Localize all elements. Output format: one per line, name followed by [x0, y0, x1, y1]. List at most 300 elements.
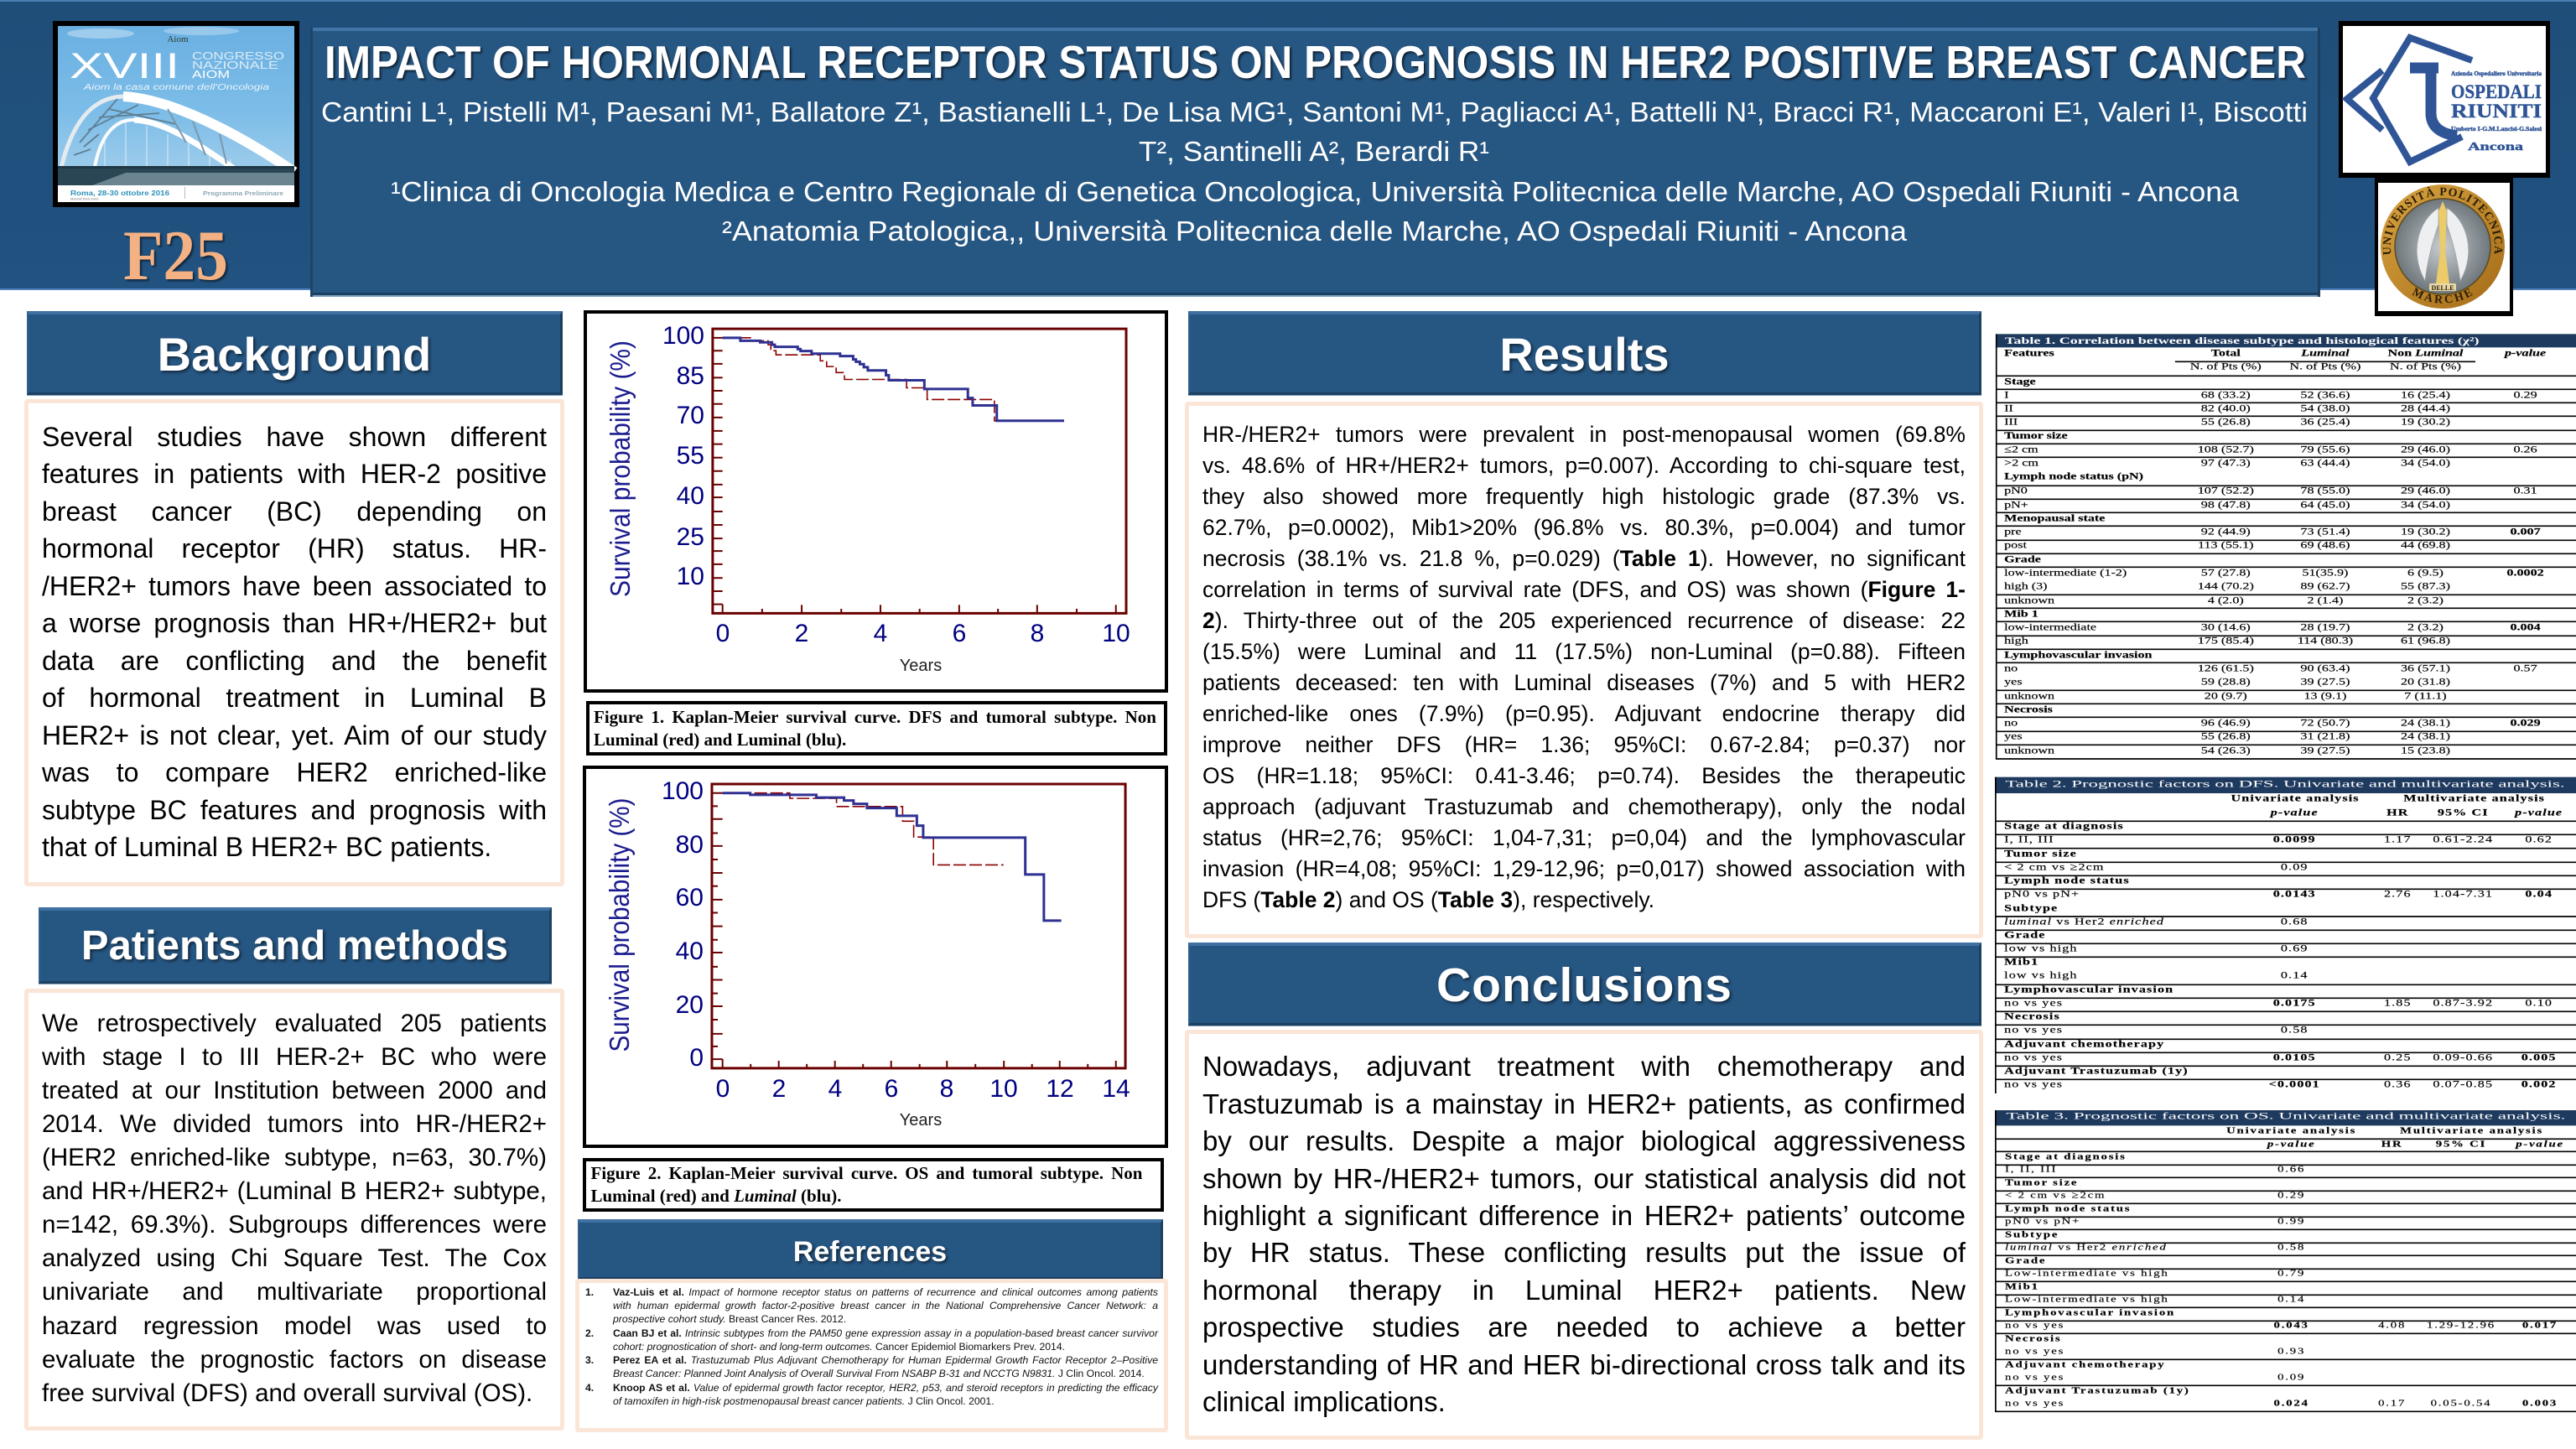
table 1 rows: 16 (25.4): [2401, 389, 2450, 401]
x axis numbers: 8: [1031, 620, 1044, 647]
table 1 rows: 78 (55.0): [2300, 485, 2350, 496]
table 2 rows: 0.10: [2525, 997, 2553, 1009]
table 1 rows: 144 (70.2): [2198, 580, 2254, 592]
table 3 rows: 0.05-0.54: [2431, 1398, 2491, 1408]
chart axes: [713, 329, 1126, 613]
y axis numbers: 10: [677, 563, 704, 590]
congress poster image: [53, 21, 299, 207]
y axis numbers: [662, 777, 704, 1072]
table 3 rows: p-value: [2267, 1139, 2315, 1149]
title panel: [310, 28, 2320, 297]
table 2 rows: 2.76: [2384, 888, 2412, 900]
background paragraph: subtype BC features and prognosis with: [42, 795, 547, 825]
table 1 rows: N. of Pts (%): [2390, 361, 2461, 372]
table 3 rows: 0.99: [2277, 1215, 2305, 1226]
table 3 rows: pN0 vs pN+: [2005, 1215, 2080, 1226]
figure 1 caption: Figure 1. Kaplan-Meier survival curve. DFS and tumoral subtype. Non: [594, 707, 1156, 727]
table 1 rows: 2 (3.2): [2407, 595, 2444, 606]
reference 3: Perez EA et al. Trastuzumab Plus Adjuvant Chemotherapy for Human Epidermal Growth Factor Receptor 2–Positive: [613, 1354, 1158, 1366]
table 1 rows: unknown: [2004, 745, 2054, 756]
table 1 rows: Luminal: [2300, 347, 2350, 359]
table 2: prognostic factors on DFS: [1995, 776, 2576, 1093]
background paragraph: a worse prognosis than HR+/HER2+ but: [42, 608, 547, 638]
table 3 rows: < 2 cm vs ≥2cm: [2005, 1190, 2106, 1200]
panel: background text: [24, 399, 564, 886]
table 3 rows: luminal vs Her2 enriched: [2005, 1241, 2168, 1252]
table 3 rows: 0.14: [2277, 1293, 2305, 1304]
table 1 rows: 2 (3.2): [2407, 621, 2444, 633]
table 1 rows: no: [2004, 662, 2018, 674]
bridge: [61, 96, 294, 172]
logo: Università Politecnica delle Marche seal: DELLE: [2431, 284, 2454, 292]
table 1 rows: low-intermediate (1-2): [2004, 567, 2127, 579]
table 2 rows: HR: [2386, 808, 2409, 818]
authors: Cantini L¹, Pistelli M¹, Paesani M¹, Ballatore Z¹, Bastianelli L¹, De Lisa MG¹, Santoni M¹, Pagliacci A¹, Battelli N¹, Bracci R¹, Maccaroni E¹, Valeri I¹, Biscotti: [321, 96, 2308, 127]
poster heading: AIOM: [192, 68, 230, 80]
table 2 rows: low vs high: [2004, 969, 2078, 981]
figure 2 caption: Figure 2. Kaplan-Meier survival curve. OS and tumoral subtype. Non: [590, 1163, 1142, 1183]
table 1 title: Table 1. Correlation between disease subtype and histological features (χ²): [2005, 335, 2480, 346]
table 1 rows: 30 (14.6): [2201, 621, 2251, 633]
y axis numbers: 55: [677, 442, 704, 470]
table 1 rows: 96 (46.9): [2201, 717, 2251, 729]
logo: Università Politecnica delle Marche seal: [2375, 178, 2513, 316]
patients and methods paragraph: and HR+/HER2+ (Luminal B HER2+ subtype,: [42, 1177, 547, 1205]
logo: Ospedali Riuniti: RIUNITI: [2451, 101, 2542, 122]
table 1 rows: 6 (9.5): [2407, 567, 2444, 579]
table 1 rows: p-value: [2503, 347, 2546, 359]
table 1 rows: 20 (9.7): [2205, 690, 2247, 702]
table 1 rows: N. of Pts (%): [2190, 361, 2262, 372]
results paragraph: [1202, 422, 1966, 912]
table 1 rows: ≤2 cm: [2004, 444, 2038, 455]
table 1 rows: 52 (36.6): [2300, 389, 2350, 401]
table 3 rows: Necrosis: [2005, 1333, 2061, 1343]
table 2 rows: low vs high: [2004, 943, 2078, 954]
table 3 rows: Multivariate analysis: [2400, 1125, 2543, 1135]
table 3 rows: HR: [2381, 1139, 2402, 1149]
logo: Ospedali Riuniti: Azienda Ospedaliero Universitaria: [2451, 70, 2542, 77]
table 3 rows: no vs yes: [2005, 1346, 2064, 1356]
table 1 rows: high (3): [2004, 580, 2048, 592]
logo: Ospedali Riuniti: OSPEDALI: [2451, 81, 2542, 102]
y axis numbers: 0: [689, 1044, 704, 1072]
background paragraph: HER2+ is not clear, yet. Aim of our study: [42, 720, 547, 750]
table 1 rows: Stage: [2004, 376, 2036, 387]
poster footer: [58, 185, 294, 202]
affiliations: [391, 176, 2240, 247]
table 1 rows: 0.29: [2513, 389, 2537, 401]
patients and methods paragraph: analyzed using Chi Square Test. The Cox: [42, 1244, 547, 1272]
table 2 rows: Adjuvant chemotherapy: [2004, 1038, 2164, 1050]
x axis numbers: 0: [716, 1075, 730, 1103]
x axis title: Years: [900, 1111, 942, 1130]
table 2 rows: 0.69: [2281, 943, 2309, 954]
panel: patients and methods text: [24, 989, 564, 1431]
table 2 rows: 0.002: [2521, 1078, 2557, 1090]
conclusions paragraph: hormonal therapy in Luminal HER2+ patients. New: [1202, 1275, 1966, 1306]
logo: Università Politecnica delle Marche seal: UNIVERSITÀ POLITECNICA: [2383, 186, 2502, 255]
table 1 rows: pN0: [2004, 485, 2028, 496]
table 1 rows: Grade: [2004, 553, 2041, 565]
table 2 rows: 1.04-7.31: [2433, 888, 2493, 900]
table 1 rows: N. of Pts (%): [2289, 361, 2361, 372]
table 1 rows: II: [2004, 402, 2013, 414]
table 1 rows: 29 (46.0): [2401, 444, 2450, 455]
conclusions paragraph: prospective studies are needed to achieve a better: [1202, 1311, 1966, 1343]
x axis numbers: 4: [874, 620, 887, 647]
table 1 rows: 64 (45.0): [2300, 499, 2350, 511]
results paragraph: enriched-like ones (7.9%) (p=0.95). Adjuvant endocrine therapy did: [1202, 701, 1966, 726]
table 2 rows: 0.58: [2281, 1024, 2309, 1036]
table 3 rows: 0.17: [2378, 1398, 2406, 1408]
table 3 rows: 0.93: [2277, 1346, 2305, 1356]
table 3 rows: 0.09: [2277, 1372, 2305, 1382]
results paragraph: patients deceased: ten with Luminal diseases (7%) and 5 with HER2: [1202, 670, 1966, 695]
results paragraph: correlation in terms of survival rate (DFS, and OS) was shown (Figure 1-: [1202, 577, 1966, 602]
table 1 rows: 175 (85.4): [2198, 635, 2254, 647]
table 1 rows: 69 (48.6): [2300, 540, 2350, 551]
table 2 rows: 0.0099: [2273, 834, 2316, 845]
table 2 rows: Grade: [2004, 929, 2046, 941]
table 1 rows: 79 (55.6): [2300, 444, 2350, 455]
results paragraph: improve neither DFS (HR= 1.36; 95%CI: 0.67-2.84; p=0.37) nor: [1202, 732, 1966, 757]
table 1 rows: 34 (54.0): [2401, 457, 2450, 469]
background paragraph: Several studies have shown different: [42, 422, 547, 452]
heading: Conclusions: [1188, 943, 1981, 1026]
table 1 rows: >2 cm: [2004, 457, 2038, 469]
x axis title: Years: [900, 657, 942, 675]
heading: Background: [27, 311, 563, 395]
reference 4: [585, 1382, 1159, 1407]
authors: T², Santinelli A², Berardi R¹: [1139, 136, 1489, 167]
table 1 rows: Lymphovascular invasion: [2004, 649, 2153, 661]
table 3 rows: Stage at diagnosis: [2005, 1151, 2127, 1161]
curve: non luminal (red, dashed): [723, 338, 1064, 421]
table 2 rows: Multivariate analysis: [2403, 792, 2545, 804]
table 3 title: Table 3. Prognostic factors on OS. Univariate and multivariate analysis.: [2006, 1110, 2565, 1122]
x axis numbers: 12: [1046, 1075, 1074, 1103]
results paragraph: 2). Thirty-three out of the 205 experienced recurrence of disease: 22: [1202, 608, 1966, 633]
table 1 rows: yes: [2004, 676, 2023, 688]
patients and methods paragraph: treated at our Institution between 2000 and: [42, 1077, 547, 1104]
heading: Patients and methods: Patients and methods: [81, 923, 508, 969]
results paragraph: HR-/HER2+ tumors were prevalent in post-menopausal women (69.8%: [1202, 422, 1966, 447]
reference 1: with human epidermal growth factor-2-positive breast cancer in the National Comprehensive Cancer Network: a: [613, 1300, 1158, 1311]
table 1 rows: 114 (80.3): [2298, 635, 2353, 647]
table 1 rows: 54 (26.3): [2201, 745, 2251, 756]
table 2 rows: <0.0001: [2269, 1078, 2320, 1090]
table 2 rows: 0.61-2.24: [2433, 834, 2493, 845]
figure 1 caption: [586, 701, 1167, 756]
y axis numbers: 40: [676, 937, 704, 965]
background paragraph: that of Luminal B HER2+ BC patients.: [42, 832, 491, 862]
header band: [0, 0, 2576, 290]
table 1 rows: [2004, 347, 2546, 756]
reference 3: [585, 1354, 1158, 1379]
results paragraph: OS (HR=1.18; 95%CI: 0.41-3.46; p=0.74). Besides the therapeutic: [1202, 763, 1966, 788]
table 1 rows: Non Luminal: [2388, 347, 2463, 359]
table 2 rows: 0.09: [2281, 861, 2309, 873]
y axis numbers: 20: [676, 991, 704, 1019]
table 1 rows: 126 (61.5): [2198, 662, 2254, 674]
y axis numbers: 85: [677, 362, 704, 390]
table 1 rows: high: [2004, 635, 2028, 647]
background paragraph: /HER2+ tumors have been associated to: [42, 571, 547, 601]
table 2 rows: Lymph node status: [2004, 875, 2130, 886]
table 1 rows: 44 (69.8): [2401, 540, 2450, 551]
table 3 rows: Tumor size: [2005, 1177, 2078, 1187]
table 2 rows: 1.17: [2384, 834, 2412, 845]
table 1 rows: yes: [2004, 730, 2023, 742]
results paragraph: DFS (Table 2) and OS (Table 3), respectively.: [1202, 887, 1654, 912]
table 2 rows: 0.09-0.66: [2433, 1052, 2493, 1063]
x axis numbers: 0: [716, 620, 730, 647]
table 3: prognostic factors on OS: [1995, 1110, 2576, 1412]
table 2 rows: I, II, III: [2004, 834, 2054, 845]
table 2 rows: 0.005: [2521, 1052, 2557, 1063]
table 1 rows: 55 (26.8): [2201, 730, 2251, 742]
table 1 rows: pre: [2004, 526, 2022, 538]
background paragraph: data are conflicting and the benefit: [42, 646, 547, 676]
table 1 rows: 24 (38.1): [2401, 730, 2450, 742]
table 3 rows: Univariate analysis: [2226, 1125, 2356, 1135]
table 1 rows: 59 (28.8): [2201, 676, 2251, 688]
heading: Results: [1188, 311, 1981, 395]
table 1 rows: 72 (50.7): [2300, 717, 2350, 729]
table 3 rows: 4.08: [2378, 1320, 2406, 1330]
table 1 rows: 107 (52.2): [2198, 485, 2254, 496]
table 1 rows: 39 (27.5): [2300, 676, 2350, 688]
table 1 rows: post: [2004, 540, 2027, 551]
table 1 rows: 24 (38.1): [2401, 717, 2450, 729]
x axis numbers: 10: [1102, 620, 1130, 647]
table 1 rows: 97 (47.3): [2201, 457, 2251, 469]
patients and methods paragraph: hazard regression model was used to: [42, 1312, 547, 1340]
affiliations: ¹Clinica di Oncologia Medica e Centro Regionale di Genetica Oncologica, Università Politecnica delle Marche, AO Ospedali Riuniti - Ancona: [391, 176, 2240, 207]
table 2 rows: 0.68: [2281, 916, 2309, 927]
table 1 rows: Menopausal state: [2004, 512, 2105, 524]
conclusions paragraph: understanding of HR and HER bi-directional cross talk and its: [1202, 1349, 1966, 1380]
table 3 rows: Lymph node status: [2005, 1203, 2131, 1213]
table 1 rows: Necrosis: [2004, 704, 2053, 715]
table 1 rows: 92 (44.9): [2201, 526, 2251, 538]
figure 2 caption: Luminal (red) and Luminal (blu).: [590, 1186, 841, 1206]
conclusions paragraph: shown by HR-/HER2+ tumors, our statistical analysis did not: [1202, 1163, 1966, 1194]
table 3 rows: I, II, III: [2005, 1163, 2057, 1174]
table 1 rows: unknown: [2004, 595, 2054, 606]
logo: Ospedali Riuniti: [2339, 21, 2550, 178]
table 1 rows: 63 (44.4): [2300, 457, 2350, 469]
table 1 rows: Total: [2211, 347, 2241, 359]
table 1 rows: 31 (21.8): [2300, 730, 2350, 742]
background paragraph: of hormonal treatment in Luminal B: [42, 683, 547, 713]
table 1 rows: no: [2004, 717, 2018, 729]
table 2 rows: no vs yes: [2004, 997, 2063, 1009]
table 1 rows: 2 (1.4): [2307, 595, 2344, 606]
table 2 rows: Univariate analysis: [2231, 792, 2360, 804]
x axis numbers: 2: [772, 1075, 786, 1103]
congress poster image: Programma Preliminare: [203, 191, 283, 197]
table 2 rows: 0.07-0.85: [2433, 1078, 2493, 1090]
heading: Results: Results: [1499, 328, 1670, 381]
table 2 rows: 0.0143: [2273, 888, 2316, 900]
table 2 rows: Subtype: [2004, 902, 2058, 914]
table 1: disease subtype and histological features: [1996, 334, 2576, 760]
results paragraph: approach (adjuvant Trastuzumab and chemotherapy), only the nodal: [1202, 794, 1966, 819]
table 1 rows: pN+: [2004, 499, 2028, 511]
y axis numbers: 80: [676, 831, 704, 859]
authors: [321, 96, 2308, 167]
table 3 rows: no vs yes: [2005, 1320, 2064, 1330]
table 2 rows: Adjuvant Trastuzumab (1y): [2004, 1065, 2189, 1077]
results paragraph: necrosis (38.1% vs. 21.8 %, p=0.029) (Table 1). However, no significant: [1202, 546, 1966, 571]
table 2 rows: 0.87-3.92: [2433, 997, 2493, 1009]
heading: Background: Background: [158, 328, 431, 381]
logo: Università Politecnica delle Marche seal: MARCHE: [2412, 287, 2473, 304]
table 3 rows: p-value: [2515, 1139, 2564, 1149]
table 3 rows: Subtype: [2005, 1229, 2059, 1239]
congress poster image: Roma, 28-30 ottobre 2016: [70, 190, 170, 197]
reference 1: prospective cohort study. Breast Cancer Res. 2012.: [613, 1313, 846, 1325]
curve: non luminal (red, dashed): [723, 793, 1004, 865]
table 2 rows: no vs yes: [2004, 1024, 2063, 1036]
x axis numbers: 14: [1102, 1075, 1130, 1103]
table 3 rows: Low-intermediate vs high: [2005, 1293, 2169, 1304]
table 3 rows: 0.66: [2277, 1163, 2305, 1174]
poster heading: [70, 34, 284, 92]
logo: Ospedali Riuniti: Umberto I-G.M.Lancisi-G.Salesi: [2451, 126, 2542, 132]
table 1 rows: 19 (30.2): [2401, 526, 2450, 538]
table 1 rows: 0.31: [2513, 485, 2537, 496]
figure 1: Kaplan-Meier DFS chart: [584, 310, 1168, 693]
conclusions paragraph: Trastuzumab is a mainstay in HER2+ patients, as confirmed: [1202, 1088, 1966, 1119]
poster heading: Aiom: [167, 34, 189, 44]
table 2 rows: 1.85: [2384, 997, 2412, 1009]
table 3 rows: 0.29: [2277, 1190, 2305, 1200]
table 3 rows: 0.003: [2522, 1398, 2558, 1408]
panel: results text: [1185, 402, 1983, 938]
poster heading: CONGRESSO: [192, 49, 284, 62]
table 2 rows: 95% CI: [2438, 808, 2489, 818]
table 1 rows: 39 (27.5): [2300, 745, 2350, 756]
table 1 rows: 7 (11.1): [2404, 690, 2447, 702]
results paragraph: they also showed more frequently high histologic grade (87.3% vs.: [1202, 484, 1966, 509]
x axis numbers: 8: [940, 1075, 953, 1103]
table 1 rows: 0.57: [2513, 662, 2537, 674]
table 1 rows: 29 (46.0): [2401, 485, 2450, 496]
background paragraph: was to compare HER2 enriched-like: [42, 757, 547, 787]
table 3 rows: 0.79: [2277, 1268, 2305, 1278]
table 1 rows: unknown: [2004, 690, 2054, 702]
conclusions paragraph: highlight a significant difference in HER2+ patients’ outcome: [1202, 1200, 1966, 1231]
table 1 rows: 36 (25.4): [2300, 416, 2350, 428]
table 1 rows: 55 (87.3): [2401, 580, 2450, 592]
panel: references: 3.: [585, 1354, 594, 1366]
figure 2 caption: [583, 1158, 1164, 1212]
table 3 rows: 0.58: [2277, 1241, 2305, 1252]
y axis numbers: [662, 322, 704, 590]
table 2 rows: 0.0105: [2273, 1052, 2316, 1063]
table 1 rows: Mib 1: [2004, 608, 2038, 620]
table 1 rows: 113 (55.1): [2198, 540, 2254, 551]
table 3 rows: Adjuvant chemotherapy: [2005, 1359, 2165, 1369]
table 2 rows: 0.36: [2384, 1078, 2412, 1090]
table 1 rows: 20 (31.8): [2401, 676, 2450, 688]
conclusions paragraph: Nowadays, adjuvant treatment with chemotherapy and: [1202, 1051, 1966, 1082]
reference 1: [585, 1286, 1158, 1325]
patients and methods paragraph: n=142, 69.3%). Subgroups differences were: [42, 1211, 547, 1239]
table 1 rows: 54 (38.0): [2300, 402, 2350, 414]
poster heading: Aiom la casa comune dell'Oncologia: [83, 83, 270, 92]
logo: Ospedali Riuniti: Ancona: [2468, 141, 2523, 153]
results paragraph: 62.7%, p=0.0002), Mib1>20% (96.8% vs. 80.3%, p=0.004) and tumor: [1202, 515, 1966, 540]
patients and methods paragraph: evaluate the prognostic factors on disease: [42, 1346, 547, 1374]
table 2 rows: 0.14: [2281, 969, 2309, 981]
heading: References: [578, 1219, 1163, 1280]
table 1 rows: 0.0002: [2506, 567, 2544, 579]
table 3 rows: Grade: [2005, 1255, 2046, 1265]
panel: references: 1.: [585, 1286, 594, 1298]
results paragraph: vs. 48.6% of HR+/HER2+ tumors, p=0.007). According to chi-square test,: [1202, 453, 1966, 478]
table 1 rows: 89 (62.7): [2300, 580, 2350, 592]
panel: references: 4.: [585, 1382, 594, 1394]
table 1 rows: 28 (44.4): [2401, 402, 2450, 414]
results paragraph: invasion (HR=4,08; 95%CI: 1,29-12,96; p=0,017) showed association with: [1202, 856, 1966, 881]
reference 2: [585, 1327, 1159, 1353]
panel: conclusions text: [1185, 1030, 1983, 1440]
table 1 rows: 61 (96.8): [2401, 635, 2450, 647]
table 2 title: Table 2. Prognostic factors on DFS. Univariate and multivariate analysis.: [2005, 778, 2565, 790]
y axis numbers: 100: [662, 777, 704, 805]
table 1 rows: Lymph node status (pN): [2004, 470, 2143, 482]
table 1 rows: 15 (23.8): [2401, 745, 2450, 756]
congress poster image: Marriott Park Hotel: [70, 196, 98, 201]
table 2 rows: Necrosis: [2004, 1010, 2060, 1022]
table 2 rows: Stage at diagnosis: [2004, 820, 2124, 832]
table 2 rows: < 2 cm vs ≥2cm: [2004, 861, 2105, 873]
y axis numbers: 100: [662, 322, 704, 350]
figure 2: Kaplan-Meier OS chart: [583, 766, 1168, 1148]
results paragraph: (15.5%) were Luminal and 11 (17.5%) non-Luminal (p=0.88). Fifteen: [1202, 639, 1966, 664]
reference 3: Breast Cancer: Planned Joint Analysis of Overall Survival From NSABP B-31 and NCCTG N9831. J Clin Oncol. 2014.: [613, 1368, 1145, 1379]
heading: Conclusions: Conclusions: [1436, 958, 1732, 1012]
conclusions paragraph: by HR status. These conflicting results put the issue of: [1202, 1237, 1966, 1268]
x axis numbers: 6: [953, 620, 966, 647]
table 3 rows: no vs yes: [2005, 1372, 2064, 1382]
reference 4: of tamoxifen in high-risk postmenopausal breast cancer patients. J Clin Oncol. 2001.: [613, 1395, 995, 1407]
heading: Patients and methods: [39, 907, 552, 984]
table 3 rows: Lymphovascular invasion: [2005, 1307, 2175, 1317]
x axis numbers: [716, 1075, 1130, 1103]
table 2 rows: Lymphovascular invasion: [2004, 984, 2174, 995]
table 1 rows: 73 (51.4): [2300, 526, 2350, 538]
y axis numbers: 70: [677, 402, 704, 429]
background paragraph: [42, 422, 547, 862]
table 3 rows: Mib1: [2005, 1281, 2039, 1291]
reference 2: cohort: prognostication of short- and long-term outcomes. Cancer Epidemiol Biomarkers Prev. 2014.: [613, 1341, 1065, 1353]
table 1 rows: 68 (33.2): [2201, 389, 2251, 401]
reference 2: Caan BJ et al. Intrinsic subtypes from the PAM50 gene expression assay in a population-based breast cancer survivor: [613, 1327, 1158, 1339]
patients and methods paragraph: [42, 1010, 547, 1407]
table 3 rows: 0.017: [2522, 1320, 2558, 1330]
background paragraph: hormonal receptor (HR) status. HR-: [42, 533, 547, 564]
table 3 rows: Adjuvant Trastuzumab (1y): [2005, 1385, 2190, 1395]
table 1 rows: 90 (63.4): [2300, 662, 2350, 674]
y axis numbers: 60: [676, 884, 704, 911]
table 1 rows: 98 (47.8): [2201, 499, 2251, 511]
affiliations: ²Anatomia Patologica,, Università Politecnica delle Marche, AO Ospedali Riuniti - Ancona: [722, 216, 1908, 247]
